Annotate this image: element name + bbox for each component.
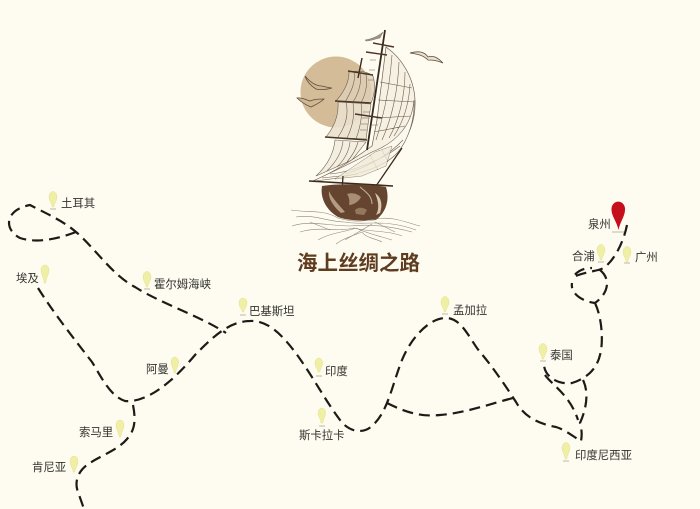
- marker: 斯卡拉卡: 斯卡拉卡: [299, 428, 345, 442]
- route: Somalia and Kenya branch: [76, 405, 135, 509]
- marker: 索马里: [79, 420, 124, 439]
- marker: 索马里: 索马里: [79, 425, 113, 439]
- marker: 孟加拉: 孟加拉: [453, 303, 487, 317]
- route: Turkey loop to Strait of Hormuz: [9, 205, 226, 333]
- marker: 巴基斯坦: 巴基斯坦: [249, 304, 295, 318]
- marker: 广州: [623, 247, 658, 264]
- marker: 印度: [315, 358, 348, 378]
- marker: 斯卡拉卡: [299, 408, 345, 442]
- masts and yards: [309, 30, 402, 192]
- marker: 印度尼西亚: [562, 442, 632, 462]
- marker: 泉州 red pin: [588, 202, 625, 232]
- marker: 埃及: 埃及: [16, 271, 39, 285]
- marker: 合浦: [572, 245, 605, 263]
- route: Sri Lanka to Indonesia branch: [387, 398, 513, 415]
- route: Thailand to Indonesia branches: [545, 375, 586, 441]
- marker: 阿曼: 阿曼: [146, 363, 169, 376]
- route: Quanzhou through the Hepu loop: [544, 225, 627, 383]
- ship hull: [322, 184, 388, 221]
- marker: 泰国: 泰国: [550, 348, 573, 362]
- marker: 广州: 广州: [635, 251, 658, 264]
- sea waves: [291, 210, 420, 244]
- marker: 泉州 red pin: 泉州: [588, 217, 611, 231]
- marker: 土耳其: [49, 192, 95, 210]
- sun disc: [300, 56, 372, 128]
- marker: 霍尔姆海峡: 霍尔姆海峡: [154, 277, 212, 291]
- marker: 阿曼: [146, 357, 179, 376]
- illustration: sailing ship with sun and birds: [291, 30, 443, 244]
- marker: 肯尼亚: 肯尼亚: [32, 461, 66, 474]
- marker: 印度尼西亚: 印度尼西亚: [575, 448, 632, 462]
- birds: [297, 52, 443, 107]
- marker: 巴基斯坦: [239, 298, 295, 318]
- rear sails: [316, 71, 374, 176]
- marker: 土耳其: 土耳其: [61, 197, 95, 210]
- title: 海上丝绸之路: [297, 251, 420, 275]
- marker: 合浦: 合浦: [572, 249, 595, 263]
- marker: 印度: 印度: [325, 364, 348, 378]
- route: main dashed sea route: [9, 205, 627, 509]
- marker: 泰国: [539, 344, 573, 362]
- marker: 肯尼亚: [32, 456, 78, 474]
- marker: 霍尔姆海峡: [143, 272, 212, 291]
- marker: 孟加拉: [441, 296, 487, 317]
- large foresail: [313, 47, 415, 181]
- marker: 埃及: [16, 265, 49, 285]
